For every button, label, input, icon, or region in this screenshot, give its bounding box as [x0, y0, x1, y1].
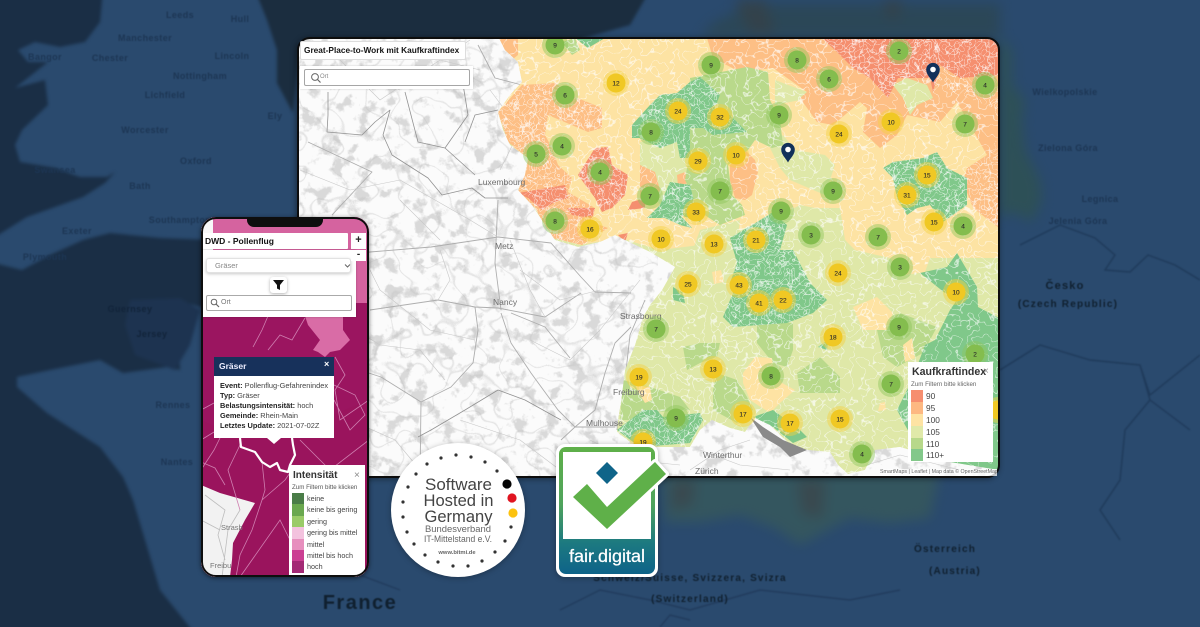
- legend rows: 110: [926, 439, 939, 449]
- zoom in: [351, 233, 366, 249]
- cluster markers: 10: [657, 236, 665, 243]
- cluster markers: 15: [836, 416, 844, 423]
- legend title: Intensität: [293, 470, 337, 481]
- cluster markers: 8: [795, 57, 799, 64]
- cluster markers: 31: [903, 192, 911, 199]
- icon: location pin: [926, 63, 940, 82]
- zoom out: -: [357, 249, 360, 260]
- legend rows: gering bis mittel: [307, 528, 357, 537]
- legend rows: 105: [926, 427, 940, 437]
- icon: magnifier: [210, 298, 220, 308]
- cluster markers: [523, 32, 1011, 467]
- background place names: Legnica: [1082, 194, 1119, 204]
- cluster markers: 10: [732, 152, 740, 159]
- basemap roads: [298, 40, 960, 477]
- filter button: [270, 277, 287, 293]
- popup body: Typ: Gräser: [220, 391, 260, 400]
- map title: [300, 41, 466, 60]
- background place names: Zielona Góra: [1038, 143, 1098, 153]
- badge text: www.bitmi.de: [437, 550, 476, 556]
- cluster markers: 7: [889, 381, 893, 388]
- coloured overlay on background: [660, 0, 1042, 545]
- background place names: Nottingham: [173, 71, 227, 81]
- map place labels: Mulhouse: [586, 418, 623, 428]
- map place labels: Winterthur: [703, 450, 742, 460]
- legend hint: Zum Filtern bitte klicken: [911, 381, 976, 388]
- cluster markers: 21: [752, 237, 760, 244]
- legend rows: 90: [926, 391, 935, 401]
- cluster markers: 7: [876, 234, 880, 241]
- region fills: [495, 38, 999, 477]
- checkmark outline: [607, 462, 666, 529]
- cluster markers: 15: [923, 172, 931, 179]
- background place names: Chester: [92, 53, 128, 63]
- badge text: IT-Mittelstand e.V.: [424, 534, 492, 544]
- cluster markers: 33: [692, 209, 700, 216]
- cluster markers: 9: [709, 62, 713, 69]
- phone map: Freibu: [210, 561, 231, 570]
- German flag dots: [502, 479, 518, 518]
- panel: Kaufkraftindex map: [293, 35, 1002, 482]
- cluster markers: 24: [835, 131, 843, 138]
- cluster markers: 10: [952, 289, 960, 296]
- cluster markers: 8: [553, 218, 557, 225]
- legend title: Kaufkraftindex: [912, 366, 986, 378]
- panel: phone with Pollenflug map: [201, 217, 369, 577]
- cluster markers: 3: [898, 264, 902, 271]
- legend: Kaufkraftindex: [908, 362, 993, 462]
- cluster markers: 7: [648, 193, 652, 200]
- background place names: Southampton: [149, 215, 211, 225]
- search input: Ort: [320, 74, 328, 80]
- legend rows: gering: [307, 517, 327, 526]
- background place names: Bath: [129, 181, 151, 191]
- phone map: [201, 217, 369, 577]
- background place names: Schweiz/Suisse, Svizzera, Svizra: [593, 573, 787, 584]
- map search box: [300, 66, 473, 89]
- cluster markers: 8: [769, 373, 773, 380]
- popup body: Letztes Update: 2021-07-02Z: [220, 421, 319, 430]
- species select: Gräser: [215, 261, 238, 270]
- zoom out: [351, 250, 366, 261]
- cluster markers: 9: [831, 188, 835, 195]
- phone notch: [247, 217, 323, 227]
- background place names: Ely: [268, 111, 282, 121]
- cluster markers: 9: [897, 324, 901, 331]
- map attribution: SmartMaps | Leaflet | Map data © OpenStreetMap: [880, 469, 997, 475]
- badge: Software Hosted in Germany: [389, 440, 527, 580]
- cluster markers: 19: [635, 374, 643, 381]
- background place names: Bangor: [28, 52, 62, 62]
- background place names: Nantes: [161, 457, 193, 467]
- cluster markers: 24: [834, 270, 842, 277]
- checkmark: [573, 462, 666, 529]
- popup header: [214, 357, 334, 376]
- cluster markers: 6: [563, 92, 567, 99]
- ring of dots: [401, 453, 513, 568]
- background place names: Oxford: [180, 156, 212, 166]
- icon: chevron: [344, 264, 350, 268]
- background place names: (Austria): [929, 566, 981, 577]
- cluster markers: 3: [809, 232, 813, 239]
- legend rows: mittel: [307, 540, 324, 549]
- background boundaries: [320, 225, 1200, 627]
- cluster markers: 24: [674, 108, 682, 115]
- cluster markers: 17: [739, 411, 747, 418]
- cluster markers: 25: [684, 281, 692, 288]
- legend rows: keine: [307, 494, 324, 503]
- legend rows: 95: [926, 403, 935, 413]
- map place labels: Zürich: [695, 466, 719, 476]
- search input: [304, 69, 470, 86]
- phone frame: [201, 217, 369, 577]
- badge text: Hosted in: [424, 491, 494, 510]
- seas: [0, 0, 650, 627]
- badge text: Bundesverband: [425, 524, 491, 534]
- cluster markers: 43: [735, 282, 743, 289]
- map title: Great-Place-to-Work mit Kaufkraftindex: [304, 45, 459, 55]
- icon: location pin: [781, 143, 795, 162]
- cluster markers: 5: [534, 151, 538, 158]
- background place names: Česko: [1045, 279, 1085, 292]
- cluster markers: 13: [709, 366, 717, 373]
- cluster markers: 12: [612, 80, 620, 87]
- background place names: (Switzerland): [651, 594, 729, 605]
- cluster markers: 7: [963, 121, 967, 128]
- popup body: Belastungsintensität: hoch: [220, 401, 313, 410]
- badge: fair.digital: [552, 442, 672, 580]
- badge text: [424, 475, 494, 556]
- background place names: Jersey: [137, 329, 167, 339]
- legend hint: Zum Filtern bitte klicken: [292, 484, 357, 491]
- cluster markers: 19: [639, 439, 647, 446]
- popup tip: [267, 438, 281, 444]
- legend close: ×: [354, 470, 360, 481]
- background place names: Swansea: [34, 165, 76, 175]
- popup body: Gemeinde: Rhein-Main: [220, 411, 298, 420]
- background place names: Plymouth: [23, 252, 67, 262]
- cluster markers: 13: [710, 241, 718, 248]
- cluster markers: 4: [860, 451, 864, 458]
- legend rows: mittel bis hoch: [307, 551, 353, 560]
- icon: funnel: [273, 280, 284, 290]
- legend rows: keine bis gering: [307, 505, 357, 514]
- background place names: Manchester: [118, 33, 172, 43]
- background place names: France: [323, 592, 397, 614]
- map place labels: [478, 177, 742, 476]
- lake: [750, 417, 807, 457]
- legend rows: 110+: [926, 450, 944, 460]
- cluster markers: 18: [829, 334, 837, 341]
- phone title: DWD - Pollenflug: [205, 236, 274, 246]
- map place labels: Strasbourg: [620, 311, 662, 321]
- cluster markers: 10: [887, 119, 895, 126]
- zoom in: +: [355, 234, 362, 246]
- cluster markers: 16: [586, 226, 594, 233]
- cluster markers: 9: [674, 415, 678, 422]
- legend close: ×: [983, 366, 989, 377]
- cluster markers: 7: [654, 326, 658, 333]
- cluster markers: 9: [777, 112, 781, 119]
- cluster markers: 29: [694, 158, 702, 165]
- search input: [206, 295, 352, 311]
- background place names: (Czech Republic): [1018, 299, 1118, 310]
- cluster markers: 4: [560, 143, 564, 150]
- phone map: Strasb: [221, 523, 243, 532]
- control panel: [203, 250, 356, 317]
- cluster markers: 4: [961, 223, 965, 230]
- basemap minor roads: [298, 38, 658, 477]
- cluster markers: 2: [973, 351, 977, 358]
- popup body: [214, 376, 334, 438]
- legend rows: [292, 493, 357, 573]
- background place names: Leeds: [166, 10, 194, 20]
- cluster markers: 32: [716, 114, 724, 121]
- map place labels: Metz: [495, 241, 513, 251]
- basemap forests: [298, 38, 999, 477]
- background place names: Lincoln: [215, 51, 249, 61]
- cluster markers: 41: [755, 300, 763, 307]
- badge text: Software: [425, 475, 492, 494]
- diamond: [596, 462, 618, 484]
- cluster markers: 9: [553, 42, 557, 49]
- background place names: Jelenia Góra: [1049, 216, 1108, 226]
- badge text: Germany: [424, 507, 493, 526]
- popup: [214, 357, 334, 444]
- popup close: ×: [324, 359, 329, 369]
- legend rows: hoch: [307, 562, 323, 571]
- background place names: Hull: [231, 14, 249, 24]
- search input: Ort: [221, 299, 231, 306]
- background place names: Guernsey: [108, 304, 152, 314]
- species select: [206, 258, 351, 273]
- map place labels: Luxembourg: [478, 177, 526, 187]
- legend rows: [911, 390, 944, 461]
- badge label: fair.digital: [569, 546, 645, 566]
- cluster markers: 2: [897, 48, 901, 55]
- cluster markers: 8: [649, 129, 653, 136]
- background place names: Wielkopolskie: [1032, 87, 1098, 97]
- background place names: Exeter: [62, 226, 92, 236]
- icon: magnifier: [311, 73, 321, 83]
- background place names: Rennes: [156, 400, 190, 410]
- background place names: Österreich: [914, 542, 976, 555]
- background place names: Lichfield: [145, 90, 185, 100]
- popup header: Gräser: [219, 361, 246, 371]
- cluster markers: 4: [598, 169, 602, 176]
- phone title: [203, 233, 348, 249]
- cluster markers: 15: [930, 219, 938, 226]
- cluster markers: 22: [779, 297, 787, 304]
- cluster markers: 4: [983, 82, 987, 89]
- cluster markers: 17: [786, 420, 794, 427]
- cluster markers: 7: [718, 188, 722, 195]
- map place labels: Freiburg: [613, 387, 645, 397]
- cluster markers: 9: [779, 208, 783, 215]
- cluster markers: 6: [827, 76, 831, 83]
- map place labels: Nancy: [493, 297, 518, 307]
- legend rows: 100: [926, 415, 940, 425]
- legend: Intensität: [289, 465, 365, 577]
- background place names: Worcester: [121, 125, 169, 135]
- district boundary lines: [498, 38, 999, 477]
- popup body: Event: Pollenflug-Gefahrenindex: [220, 381, 328, 390]
